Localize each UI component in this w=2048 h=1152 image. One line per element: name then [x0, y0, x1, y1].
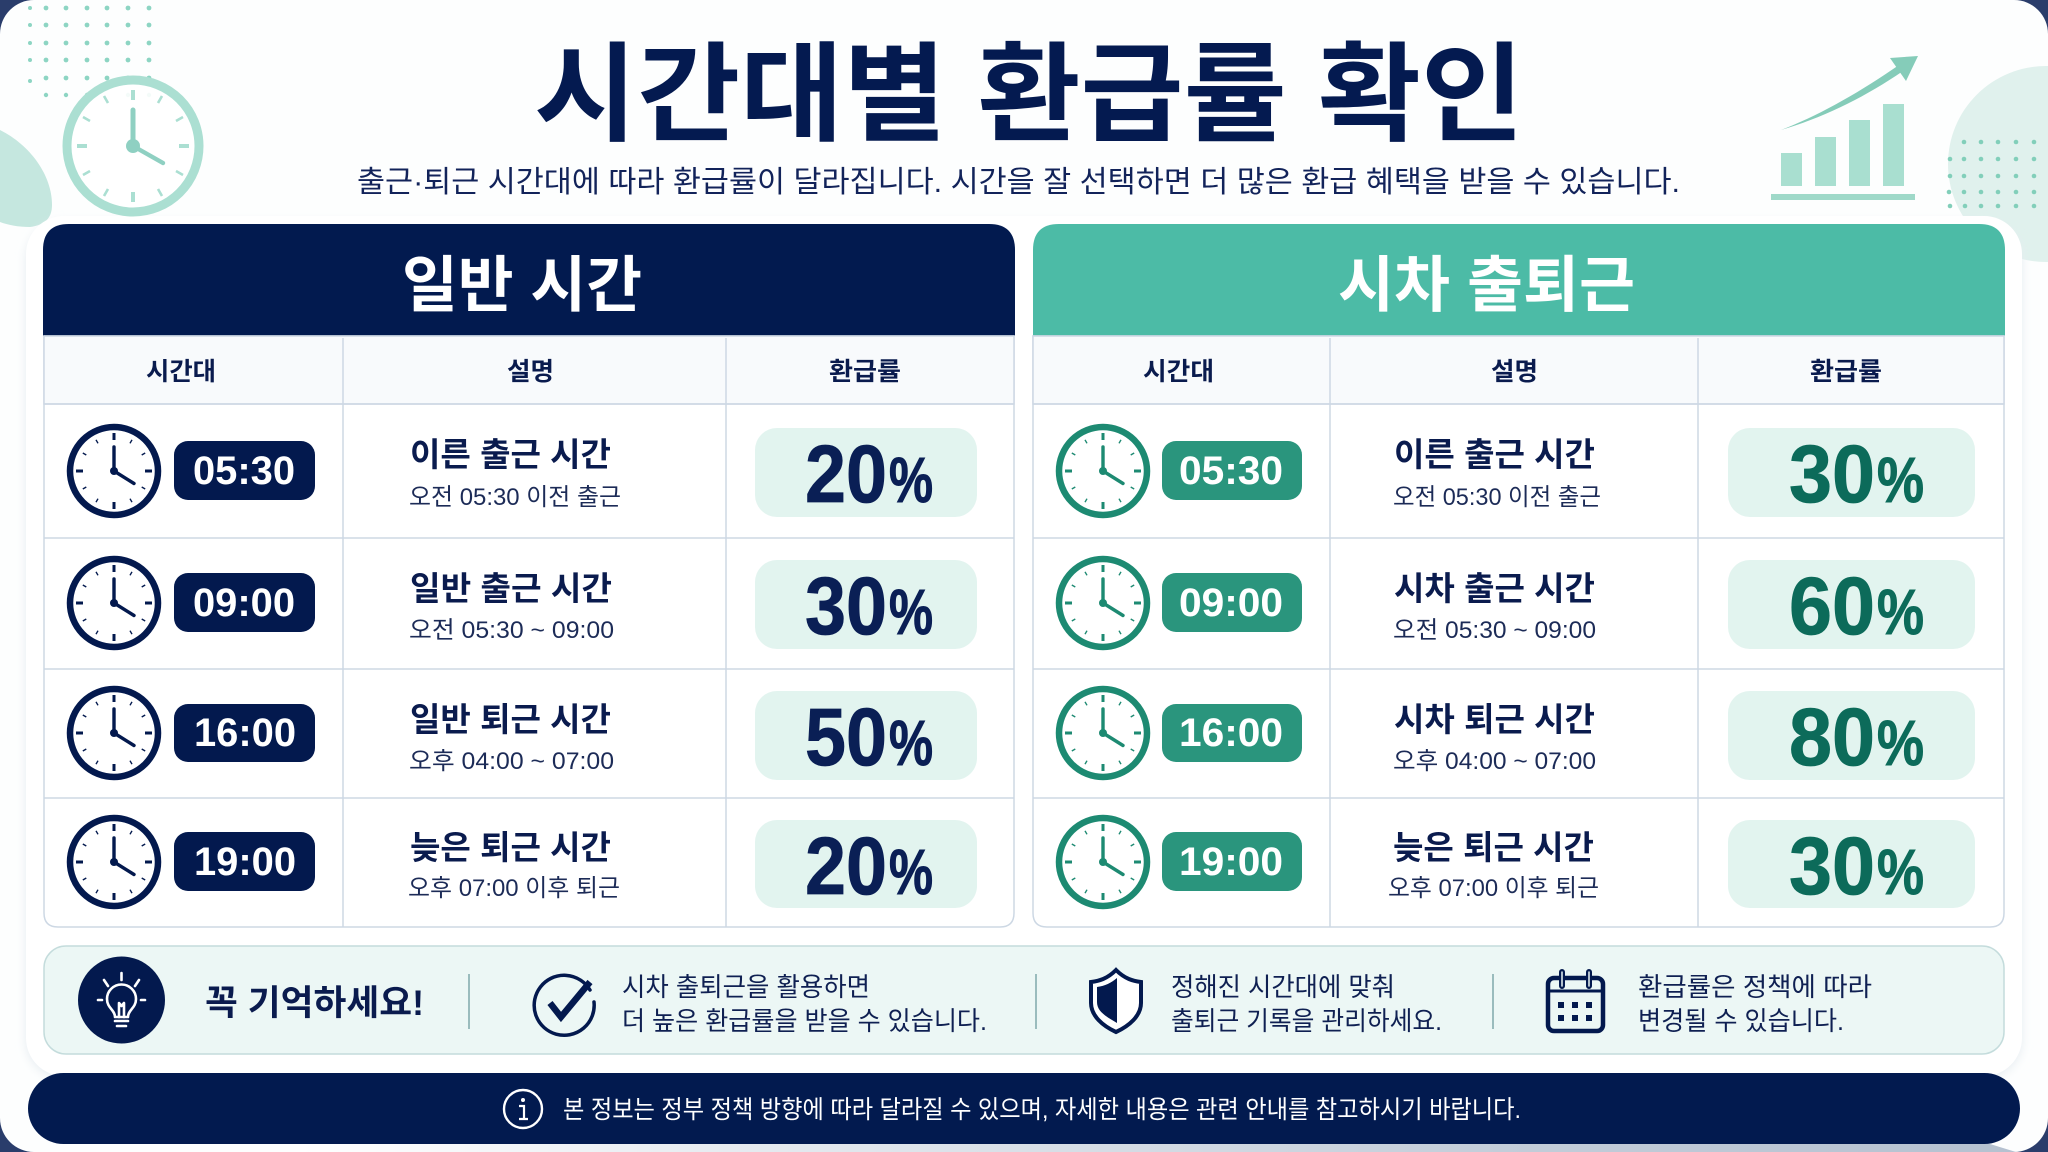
row: 05:30: 오전 05:30 이전 출근: [1393, 484, 1601, 511]
tip: policy: [1493, 972, 1872, 1036]
tip: shift commuting: [469, 972, 987, 1036]
row: 09:00: 일반 출근 시간: [410, 570, 612, 607]
panel header: [43, 224, 1015, 336]
column headers: 환급률: [829, 358, 901, 386]
panel header: 시차 출퇴근: [1338, 251, 1635, 319]
tip: shift commuting: 더 높은 환급률을 받을 수 있습니다.: [622, 1006, 987, 1036]
content card: [26, 216, 2022, 1078]
row: 09:00: [1059, 559, 1975, 652]
row: 19:00: 30: [1789, 821, 1875, 912]
row: 19:00: 19:00: [1179, 840, 1283, 884]
table frame: [1033, 336, 2004, 927]
decorative blob: right: [1948, 66, 2048, 262]
panel: 시차 출퇴근: [1033, 224, 2005, 927]
icon: light bulb: [78, 956, 165, 1044]
row: 16:00: [70, 689, 977, 783]
icon: growth chart: [1771, 56, 1918, 200]
row: 09:00: 09:00: [1179, 581, 1283, 625]
tip: policy: 환급률은 정책에 따라: [1638, 972, 1872, 1002]
tip: records: [1036, 970, 1442, 1036]
row: 09:00: %: [889, 576, 933, 648]
panel: 일반 시간: [43, 224, 1015, 927]
decorative dots: right: [1947, 140, 2036, 208]
row: 16:00: 시차 퇴근 시간: [1394, 701, 1595, 738]
row: 19:00: [1059, 818, 1975, 912]
row: 05:30: [70, 427, 977, 520]
title: 시간대별 환급률 확인: [534, 34, 1524, 155]
row: 09:00: [70, 559, 977, 652]
column headers: 시간대: [146, 358, 216, 386]
decorative blob: left: [0, 130, 52, 227]
row: 09:00: 60: [1789, 561, 1875, 652]
heading: 꼭 기억하세요!: [205, 984, 424, 1023]
row: 09:00: %: [1877, 576, 1924, 648]
row: 19:00: 오후 07:00 이후 퇴근: [408, 875, 620, 902]
row: 16:00: 80: [1789, 692, 1875, 783]
column headers: 환급률: [1810, 358, 1882, 386]
row: 05:30: 05:30: [1179, 449, 1283, 493]
table frame: [44, 336, 1014, 927]
row: 05:30: 30: [1789, 429, 1875, 520]
row: 19:00: %: [1877, 836, 1924, 908]
row: 09:00: 30: [805, 561, 887, 652]
row: 19:00: %: [889, 836, 933, 908]
row: 05:30: 05:30: [193, 449, 295, 493]
column headers: 설명: [507, 358, 554, 386]
row: 05:30: %: [1877, 444, 1924, 516]
column headers: 시간대: [1143, 358, 1214, 386]
row: 19:00: 오후 07:00 이후 퇴근: [1388, 875, 1599, 902]
footer bar: [28, 1073, 2020, 1144]
panel header: [1033, 224, 2005, 336]
tip: policy: 변경될 수 있습니다.: [1638, 1006, 1844, 1036]
footer note: 본 정보는 정부 정책 방향에 따라 달라질 수 있으며, 자세한 내용은 관련 안내를 참고하시기 바랍니다.: [563, 1096, 1521, 1124]
row: 09:00: 시차 출근 시간: [1394, 570, 1595, 607]
row: 09:00: 오전 05:30 ~ 09:00: [409, 617, 614, 644]
row: 16:00: 50: [805, 692, 887, 783]
row: 09:00: 09:00: [193, 581, 295, 625]
row: 19:00: 늦은 퇴근 시간: [1393, 829, 1594, 866]
row: 16:00: 16:00: [194, 711, 296, 755]
row: 09:00: 오전 05:30 ~ 09:00: [1393, 617, 1596, 644]
tip: records: 출퇴근 기록을 관리하세요.: [1171, 1006, 1442, 1036]
row: 05:30: 오전 05:30 이전 출근: [409, 484, 621, 511]
icon: info: [504, 1090, 542, 1128]
row: 16:00: [1059, 689, 1975, 783]
row: 19:00: [70, 818, 977, 912]
row: 05:30: 20: [805, 429, 887, 520]
row: 19:00: 19:00: [194, 840, 296, 884]
column headers: [1143, 358, 1882, 386]
row: 05:30: 이른 출근 시간: [410, 436, 611, 473]
column headers: 설명: [1491, 358, 1538, 386]
column headers: [146, 358, 901, 386]
icon: decorative clock: [67, 80, 199, 212]
row: 16:00: 16:00: [1179, 711, 1283, 755]
row: 16:00: %: [889, 707, 933, 779]
row: 05:30: [1059, 427, 1975, 520]
row: 16:00: 일반 퇴근 시간: [410, 701, 611, 738]
tip: shift commuting: 시차 출퇴근을 활용하면: [622, 972, 870, 1002]
panel header: 일반 시간: [402, 251, 642, 319]
subtitle: 출근·퇴근 시간대에 따라 환급률이 달라집니다. 시간을 잘 선택하면 더 많은 환급 혜택을 받을 수 있습니다.: [357, 166, 1680, 199]
row: 19:00: 늦은 퇴근 시간: [410, 829, 611, 866]
row: 05:30: %: [889, 444, 933, 516]
row: 16:00: 오후 04:00 ~ 07:00: [1393, 748, 1596, 775]
row: 05:30: 이른 출근 시간: [1394, 436, 1595, 473]
panel: reminder: [44, 946, 2004, 1054]
row: 16:00: %: [1877, 707, 1924, 779]
decorative dots: top left: [28, 6, 151, 97]
row: 16:00: 오후 04:00 ~ 07:00: [409, 748, 614, 775]
tip: records: 정해진 시간대에 맞춰: [1171, 972, 1395, 1002]
row: 19:00: 20: [805, 821, 887, 912]
